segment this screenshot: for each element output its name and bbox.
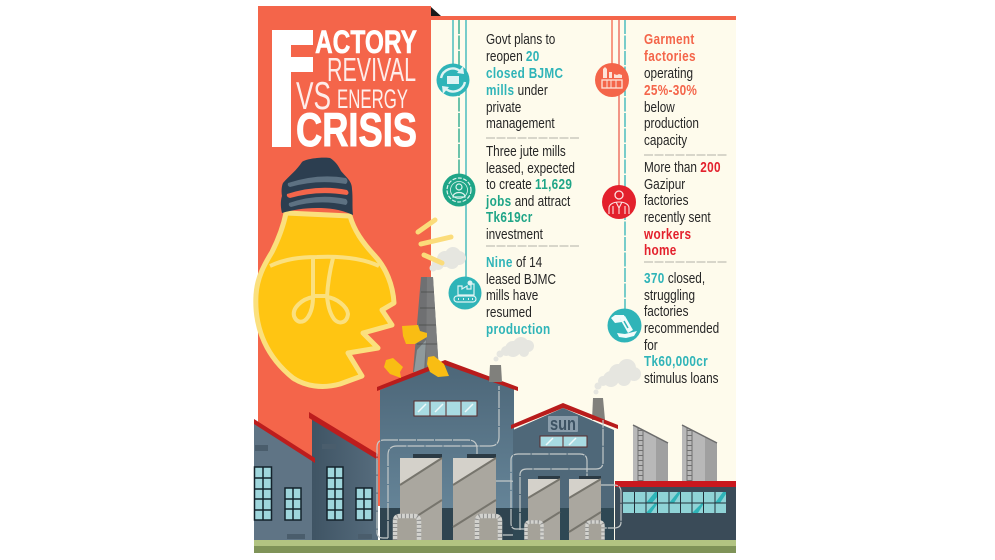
text block: stimulus loans: struggling: [644, 287, 695, 303]
title: ACTORY: [315, 24, 417, 60]
text block: reopen mills: [486, 31, 563, 131]
icon: worker gear: [442, 174, 476, 206]
text block: Gazipur factories: recently sent: [644, 209, 711, 225]
text block: garment factories: Garment: [644, 31, 695, 47]
text block: Gazipur factories: [643, 159, 721, 258]
text block: Gazipur factories: workers: [643, 226, 691, 242]
fold corner: [431, 7, 441, 16]
text block: garment factories: capacity: [644, 132, 687, 148]
storage tanks: [395, 454, 500, 540]
sun chimney: [592, 398, 605, 420]
ground: [254, 540, 736, 553]
title: ENERGY: [337, 84, 408, 114]
window row: [623, 492, 726, 513]
text block: resumed production: [486, 254, 556, 337]
text block: resumed production: leased BJMC: [486, 271, 556, 287]
lightbulb: [256, 158, 394, 386]
building: main factory: [377, 360, 520, 540]
pipes: [377, 386, 520, 538]
title: REVIVAL: [327, 51, 416, 88]
building: right low block: [615, 481, 736, 540]
text block: reopen mills: management: [486, 115, 555, 131]
text block: garment factories: below: [644, 99, 675, 115]
text block: garment factories: production: [644, 115, 699, 131]
filament: [270, 257, 379, 322]
text block: leased mills: Tk619cr: [486, 209, 533, 225]
text block: stimulus loans: [644, 270, 719, 386]
text block: garment factories: 25%-30%: [644, 82, 697, 98]
yellow blobs: [384, 325, 449, 378]
smoke cloud: sun chimney: [594, 359, 641, 394]
top bar: [431, 16, 736, 20]
text block: Gazipur factories: Gazipur: [644, 176, 686, 192]
icon: recycle mills: [436, 64, 470, 96]
smoke cloud: big chimney: [430, 247, 466, 272]
text block: stimulus loans: Tk60,000cr: [644, 353, 708, 369]
text block: resumed production: resumed: [486, 304, 532, 320]
title: CRISIS: [296, 103, 417, 156]
text block: stimulus loans: recommended: [644, 320, 719, 336]
text block: reopen mills: Govt plans to: [486, 31, 555, 47]
factory window: [414, 401, 477, 416]
text block: Gazipur factories: factories: [644, 192, 689, 208]
text block: stimulus loans: 370 closed,: [644, 270, 705, 286]
icon: garment factory: [595, 63, 629, 97]
text block: garment factories: operating: [644, 65, 693, 81]
cream panel: [431, 20, 736, 545]
light sparks: [418, 220, 451, 263]
title: VS: [296, 75, 331, 118]
building: sun factory: [511, 403, 621, 540]
text block: reopen mills: closed BJMC: [486, 65, 563, 81]
text block: leased mills: leased, expected: [486, 160, 575, 176]
text block: stimulus loans: for: [644, 337, 658, 353]
text block: leased mills: [485, 143, 575, 242]
shed windows: [254, 467, 372, 520]
bulb cap: [281, 158, 353, 215]
text block: resumed production: Nine of 14: [486, 254, 543, 270]
smoke cloud: main chimney: [494, 337, 534, 362]
text block: reopen mills: private: [486, 99, 521, 115]
text block: Gazipur factories: More than 200: [644, 159, 721, 175]
title: [272, 24, 417, 156]
sun window: [540, 436, 587, 447]
text block: resumed production: mills have: [486, 287, 538, 303]
coral title panel: [258, 6, 431, 506]
brick patches: [255, 444, 372, 539]
silos: [633, 425, 717, 481]
big chimney: [413, 277, 439, 372]
sun tanks: [526, 476, 603, 540]
text block: leased mills: investment: [486, 226, 543, 242]
text block: reopen mills: mills under: [486, 82, 548, 98]
text block: reopen mills: reopen 20: [486, 48, 540, 64]
icon: worker sent home: [602, 185, 636, 219]
small chimney: [489, 365, 502, 382]
text block: stimulus loans: factories: [644, 303, 689, 319]
text block: garment factories: [644, 31, 699, 148]
text block: leased mills: jobs and attract: [485, 193, 571, 209]
text block: resumed production: production: [486, 321, 551, 337]
connector lines: [453, 20, 625, 315]
text: right column: [643, 31, 721, 386]
text block: Gazipur factories: home: [644, 242, 677, 258]
building: left sheds: [254, 412, 378, 540]
text: left column: [485, 31, 575, 337]
icon: conveyor factory: [448, 276, 482, 310]
sun sign: sun: [550, 414, 576, 434]
icon: stimulus hands: [608, 308, 642, 342]
text block: leased mills: Three jute mills: [486, 143, 566, 159]
text block: leased mills: to create 11,629: [486, 176, 572, 192]
text block: stimulus loans: stimulus loans: [644, 370, 719, 386]
text block: garment factories: factories: [644, 48, 696, 64]
sun pipes: [511, 420, 621, 530]
